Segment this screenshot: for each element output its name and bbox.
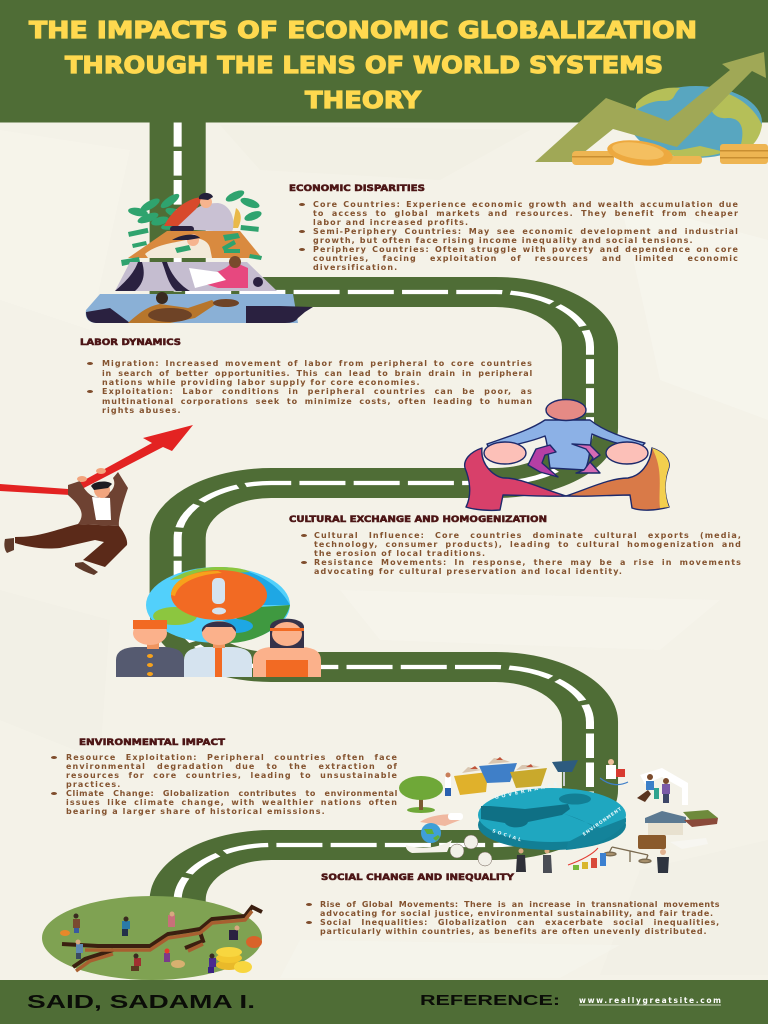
text block: labor dynamics: Exploitation: Labor conditions in peripheral countries can be poor, as (102, 387, 533, 396)
lawyer figure (657, 849, 669, 873)
text block: economic disparities: diversification. (313, 263, 398, 272)
text block: economic disparities: Semi-Periphery Countries: May see economic development and industrial (313, 227, 739, 236)
title (29, 16, 697, 114)
pyramid top tier: wealthy person with money plant (127, 188, 263, 237)
text block: labor dynamics: multinational corporations seek to minimize costs, often leading to human (102, 396, 533, 406)
small figures (60, 912, 240, 973)
puzzle disc (478, 782, 626, 850)
text block: environmental impact: practices. (66, 780, 121, 789)
text block: cultural exchange (301, 531, 742, 576)
text block: social change and inequality: advocating for social justice, environmental sustainability, and fair trade. (320, 909, 714, 918)
network of people (450, 835, 492, 866)
text block: environmental impact (51, 753, 398, 816)
person: left, orange hat (116, 620, 184, 677)
scales of justice (604, 847, 651, 863)
doctor figure (600, 759, 628, 785)
text block: cultural exchange: the erosion of local traditions. (314, 549, 486, 558)
heading: labor dynamics: LABOR DYNAMICS (80, 338, 181, 348)
businessmen shaking hands (516, 848, 552, 873)
footer reference label: REFERENCE: (420, 992, 560, 1009)
gold coins (216, 947, 252, 973)
text block: labor dynamics: rights abuses. (102, 406, 182, 415)
title: THROUGH THE LENS OF WORLD SYSTEMS (65, 51, 663, 79)
text block: cultural exchange: Cultural Influence: Core countries dominate cultural exports (media, (314, 531, 742, 540)
text block: economic disparities: Periphery Countries: Often struggle with poverty and dependence on core (313, 245, 739, 254)
text block: social change and inequality (306, 900, 720, 936)
header band (0, 0, 768, 122)
text block: environmental impact: Climate Change: Globalization contributes to environmental (66, 789, 398, 798)
text block: environmental impact: Resource Exploitation: Peripheral countries often face (66, 753, 398, 762)
bar chart with red arrow (568, 848, 606, 870)
text block: environmental impact: environmental degradation due to the extraction of (66, 762, 398, 771)
title: THEORY (305, 86, 422, 114)
text block: cultural exchange: technology, consumer products), leading to cultural homogenization and (314, 540, 742, 549)
text block: labor dynamics (87, 359, 533, 415)
footer author: SAID, SADAMA I. (27, 992, 255, 1012)
text block: cultural exchange: Resistance Movements: In response, there may be a rise in movements (314, 558, 742, 567)
person: right, headband (253, 619, 321, 677)
icon: wealth pyramid (86, 188, 313, 323)
money bag (246, 936, 262, 948)
tree (399, 776, 443, 813)
icon: three figures in a cooperative circle (465, 400, 669, 510)
text block: environmental impact: issues like climate change, with wealthier nations often (66, 798, 398, 807)
pyramid tier three: lilac (115, 262, 277, 291)
briefcase and paper (638, 835, 708, 849)
icon: globe with rising arrow and coins (535, 52, 768, 169)
icon: divided land illustration (42, 896, 262, 980)
text block: environmental impact: bearing a larger share of historical emissions. (66, 807, 326, 816)
icon: sustainability puzzle scene (399, 757, 718, 873)
text block: environmental impact: resources for core countries, leading to unsustainable (66, 771, 398, 780)
puzzle disc: SOCIAL (491, 828, 522, 843)
text block: labor dynamics: Migration: Increased movement of labor from peripheral to core countries (102, 359, 533, 368)
puzzle disc: GOVERNANCE (494, 782, 559, 801)
footer band (0, 980, 768, 1024)
building and books (645, 810, 718, 835)
icon: globe with alert and three people (116, 567, 321, 677)
hand holding globe (406, 813, 463, 853)
text block: economic disparities: to access to global markets and resources. They benefit from cheaper (313, 209, 739, 218)
puzzle disc: ENVIRONMENT (582, 806, 624, 838)
ground crack (62, 907, 262, 971)
exclamation mark (212, 578, 226, 614)
person: middle, orange tie (184, 621, 252, 677)
heading: cultural exchange: CULTURAL EXCHANGE AND HOMOGENIZATION (289, 515, 547, 525)
pyramid tier two: orange (128, 231, 262, 258)
road (178, 122, 590, 960)
text block: economic disparities: countries, facing exploitation of resources and limited economic (313, 254, 739, 263)
footer reference link: www.reallygreatsite.com (579, 996, 721, 1005)
heading: social change and inequality: SOCIAL CHANGE AND INEQUALITY (321, 873, 515, 883)
text block: economic disparities: Core Countries: Experience economic growth and wealth accumulation due (313, 200, 739, 209)
text block: social change and inequality: Rise of Global Movements: There is an increase in transnational movements (320, 900, 720, 909)
title: THE IMPACTS OF ECONOMIC GLOBALIZATION (29, 16, 697, 44)
icon: man pulling red arrow (0, 425, 193, 575)
text block: economic disparities: labor and increased profits. (313, 218, 469, 227)
solar panel (552, 760, 578, 786)
text block: labor dynamics: nations while providing labor supply for core economies. (102, 378, 421, 387)
text block: economic disparities (299, 200, 739, 272)
text block: social change and inequality: Social Inequalities: Globalization can exacerbate social inequalities, (320, 918, 720, 927)
heading: environmental impact: ENVIRONMENTAL IMPACT (79, 738, 225, 748)
text block: labor dynamics: in search of better opportunities. This can lead to brain drain in peripheral (102, 368, 533, 378)
text block: cultural exchange: advocating for cultural preservation and local identity. (314, 567, 623, 576)
text block: economic disparities: growth, but often face rising income inequality and social tensions. (313, 236, 694, 245)
recycling bins (445, 757, 547, 796)
text block: social change and inequality: particularly within countries, as benefits are often unevenly distributed. (320, 927, 707, 936)
pyramid base tier: blue (86, 294, 298, 323)
family under house (637, 768, 688, 805)
heading: economic disparities: ECONOMIC DISPARITIES (289, 184, 425, 194)
